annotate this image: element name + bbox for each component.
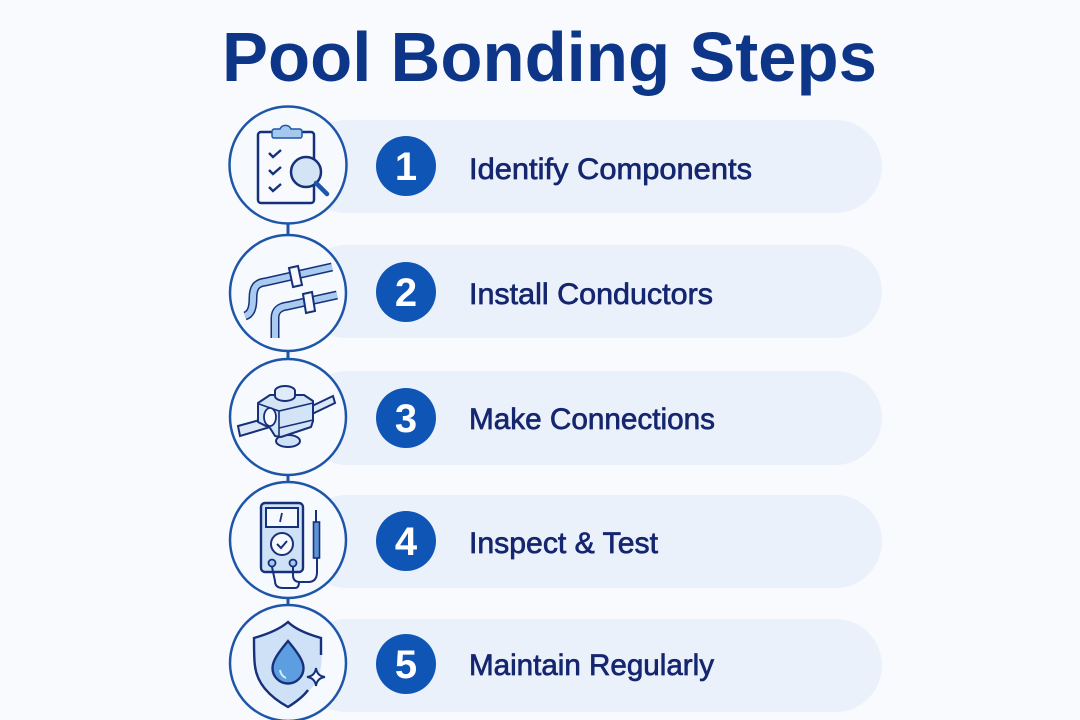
step 2 pill (300, 245, 882, 338)
step 2 badge: 2 (395, 271, 417, 315)
step 3 icon: bonding lug (230, 359, 346, 475)
step 5 badge (376, 634, 436, 694)
step 5 badge: 5 (395, 643, 417, 687)
step 4 label: Inspect & Test (469, 527, 659, 560)
step 3 badge: 3 (395, 397, 417, 441)
step 5 label: Maintain Regularly (469, 649, 714, 682)
step 1 pill (300, 120, 882, 213)
step 5 icon: shield and water drop (230, 605, 346, 720)
step 1 badge (376, 136, 436, 196)
step 5 (230, 605, 882, 720)
step 2 (230, 235, 882, 351)
step 1 icon: clipboard and magnifier (230, 106, 346, 224)
step 4 badge (376, 511, 436, 571)
step 3 label: Make Connections (469, 403, 715, 436)
title: Pool Bonding Steps (222, 18, 877, 96)
step 2 badge (376, 262, 436, 322)
step 1 (230, 106, 882, 224)
step 2 label: Install Conductors (469, 278, 713, 311)
step 4 badge: 4 (395, 520, 418, 564)
step 4 pill (300, 495, 882, 588)
step 3 (230, 359, 882, 475)
step 1 badge: 1 (395, 145, 417, 189)
step 4 (230, 482, 882, 598)
step 3 badge (376, 388, 436, 448)
step 1 label: Identify Components (469, 153, 752, 186)
step 4 icon: multimeter (230, 482, 346, 598)
step 2 icon: pipes with clamps (230, 235, 346, 351)
connector line (286, 220, 290, 610)
step 5 pill (300, 619, 882, 712)
step 3 pill (300, 371, 882, 465)
